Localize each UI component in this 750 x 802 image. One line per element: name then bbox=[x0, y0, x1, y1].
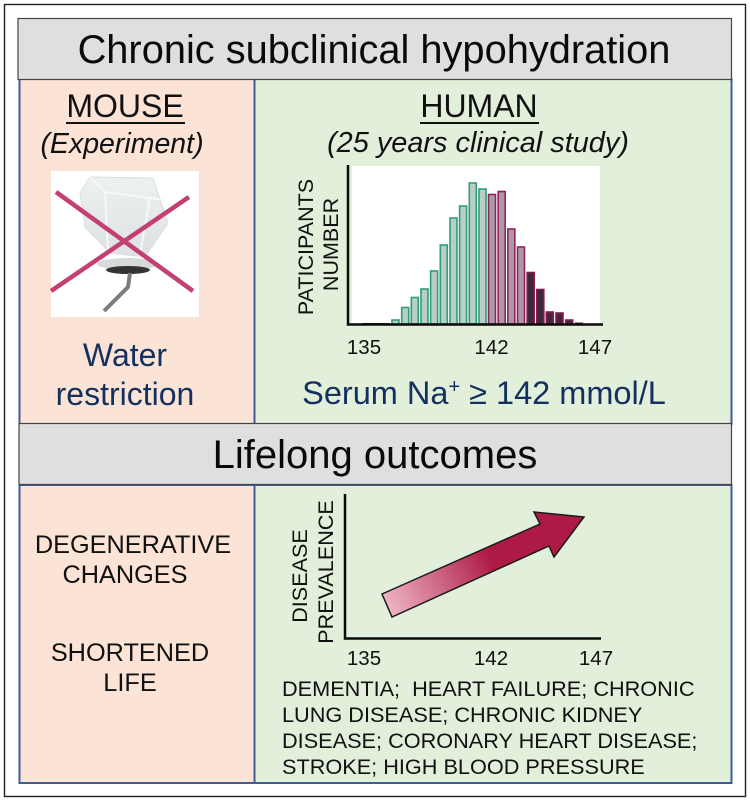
degenerative changes text: CHANGES bbox=[62, 561, 188, 589]
x axis labels: 142 bbox=[474, 647, 508, 670]
disease list: DEMENTIA; HEART FAILURE; CHRONIC bbox=[282, 676, 695, 701]
panel: human study bbox=[254, 79, 732, 424]
y axis label: DISEASE bbox=[287, 529, 312, 623]
title: Chronic subclinical hypohydration bbox=[78, 28, 670, 72]
x axis labels: 147 bbox=[579, 647, 613, 670]
y axis label: NUMBER bbox=[319, 198, 343, 291]
panel: human outcomes bbox=[254, 485, 732, 783]
chart axes bbox=[345, 494, 601, 638]
heading: lifelong outcomes: Lifelong outcomes bbox=[213, 433, 537, 477]
shortened life text: LIFE bbox=[103, 669, 157, 697]
disease prevalence chart bbox=[287, 494, 613, 670]
mouse heading: MOUSE bbox=[66, 88, 184, 124]
dark bars bbox=[527, 272, 573, 324]
degenerative changes text: DEGENERATIVE bbox=[35, 531, 231, 559]
mouse subheading: (Experiment) bbox=[40, 128, 204, 160]
histogram chart bbox=[294, 165, 612, 359]
water restriction label: Water bbox=[83, 337, 167, 373]
icon: crossed-out water bottle bbox=[51, 171, 199, 317]
disease list: STROKE; HIGH BLOOD PRESSURE bbox=[282, 754, 645, 779]
serum sodium label: Serum Na bbox=[302, 375, 448, 411]
navy low bars bbox=[362, 323, 390, 325]
x axis labels: 135 bbox=[347, 647, 381, 670]
panel: mouse experiment bbox=[20, 79, 254, 424]
pink bars bbox=[488, 192, 524, 324]
shortened life text: SHORTENED bbox=[51, 639, 209, 667]
heading: lifelong outcomes bbox=[19, 424, 732, 484]
human subheading: (25 years clinical study) bbox=[327, 127, 629, 159]
y axis label: PREVALENCE bbox=[313, 500, 338, 644]
arrow: rising prevalence bbox=[382, 512, 584, 617]
human heading: HUMAN bbox=[420, 88, 538, 124]
x axis labels bbox=[347, 336, 612, 359]
chart axes bbox=[348, 165, 603, 324]
title bbox=[18, 18, 732, 80]
y axis label: PATICIPANTS bbox=[294, 179, 318, 315]
serum sodium label: + bbox=[448, 376, 460, 398]
disease list: DISEASE; CORONARY HEART DISEASE; bbox=[282, 728, 697, 753]
water restriction label: restriction bbox=[56, 376, 194, 412]
y axis label bbox=[287, 500, 338, 644]
x axis labels: 142 bbox=[474, 336, 509, 359]
panel: mouse outcomes bbox=[20, 485, 254, 783]
disease list: LUNG DISEASE; CHRONIC KIDNEY bbox=[282, 702, 642, 727]
x axis labels: 135 bbox=[347, 336, 381, 359]
x axis labels: 147 bbox=[578, 336, 612, 359]
x axis labels bbox=[347, 647, 613, 670]
green bars bbox=[392, 183, 486, 324]
y axis label bbox=[294, 179, 343, 315]
serum sodium label: ≥ 142 mmol/L bbox=[460, 375, 666, 411]
